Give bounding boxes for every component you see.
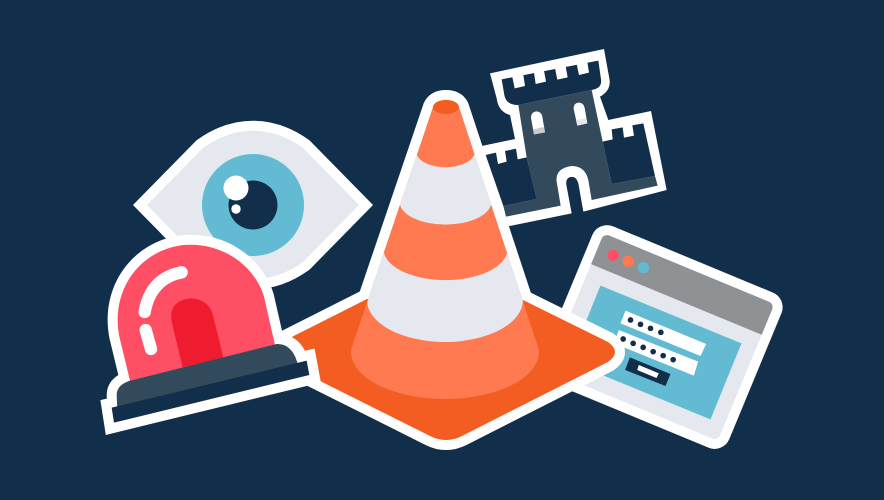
dome highlights xyxy=(145,272,182,349)
eye highlights xyxy=(224,176,248,214)
login button xyxy=(625,357,670,386)
icon: eye xyxy=(147,131,359,279)
window control dots xyxy=(607,250,649,273)
cone white outline xyxy=(360,100,530,322)
cone body xyxy=(351,100,539,399)
icon: traffic cone xyxy=(262,100,615,440)
left wing xyxy=(486,149,537,206)
username field xyxy=(620,311,706,356)
castle crown xyxy=(502,61,601,105)
iris xyxy=(202,154,304,256)
icon: red siren xyxy=(112,245,309,423)
siren base xyxy=(117,344,298,410)
castle tower wall xyxy=(503,90,658,217)
middle orange band xyxy=(378,205,513,280)
illustration canvas xyxy=(100,49,783,450)
siren white outline xyxy=(112,245,309,423)
browser title bar xyxy=(591,233,774,335)
siren lamp xyxy=(171,298,223,367)
siren base strip xyxy=(112,361,309,423)
crown teeth xyxy=(512,62,589,88)
login panel xyxy=(569,286,741,419)
password field xyxy=(614,330,698,376)
upper white band xyxy=(361,155,529,342)
icon: castle xyxy=(482,49,667,227)
cone base xyxy=(262,299,615,440)
right wing xyxy=(603,123,655,184)
right window xyxy=(574,103,587,126)
cone opening xyxy=(433,100,459,114)
pupil xyxy=(228,180,278,230)
icon: browser login window xyxy=(547,233,774,441)
left window xyxy=(531,111,545,134)
siren dome xyxy=(118,245,275,381)
